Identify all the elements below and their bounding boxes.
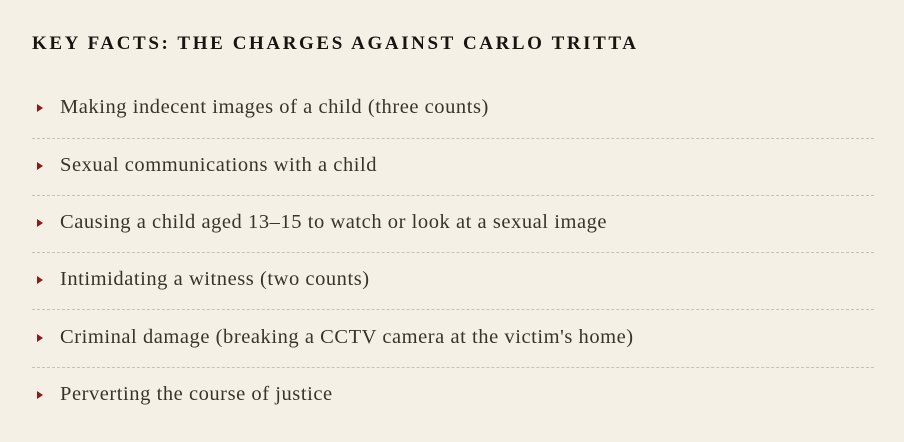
- item: causing a child to watch: Causing a child aged 13–15 to watch or look at a sexual image: [60, 211, 607, 233]
- item: perverting justice: Perverting the course of justice: [60, 383, 333, 405]
- item: criminal damage: Criminal damage (breaking a CCTV camera at the victim's home): [60, 326, 634, 348]
- title: KEY FACTS: THE CHARGES AGAINST CARLO TRITTA: [32, 33, 639, 54]
- item: intimidating a witness: Intimidating a witness (two counts): [60, 268, 370, 290]
- item: sexual communications: Sexual communications with a child: [60, 154, 377, 176]
- item: indecent images: Making indecent images of a child (three counts): [60, 96, 489, 118]
